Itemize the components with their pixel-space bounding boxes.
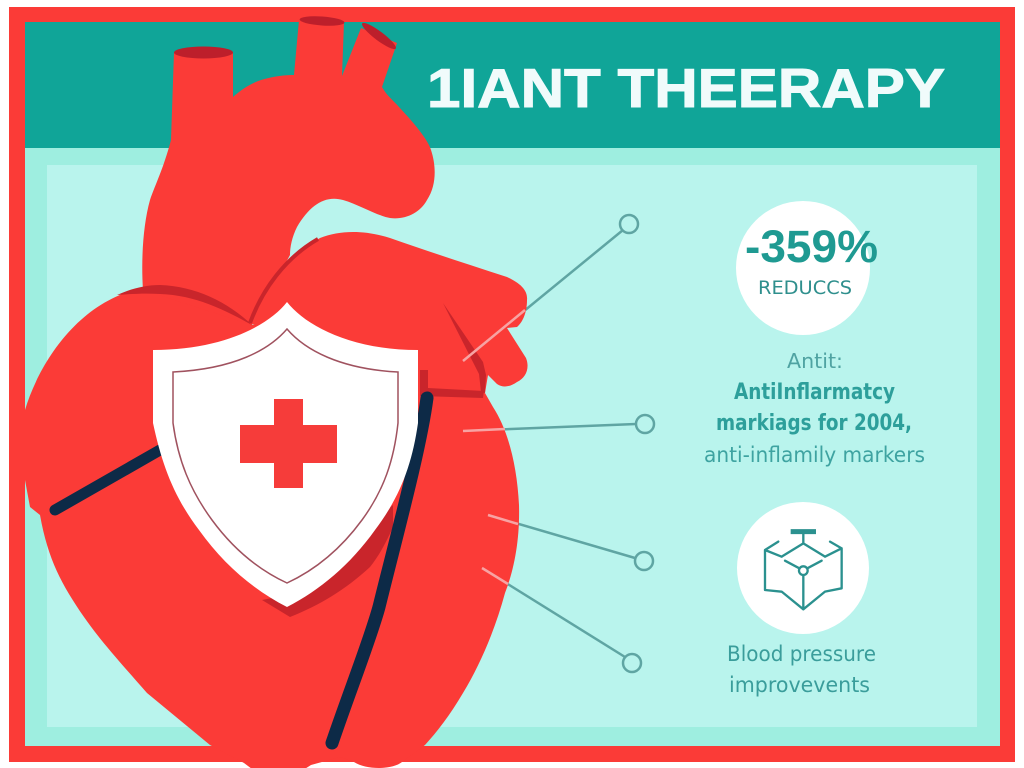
label line 1: Blood pressure (727, 642, 876, 666)
overlay line 4 (482, 568, 508, 584)
text line 4: anti-inflamily markers (704, 443, 925, 467)
band between atrium and ventricle (420, 370, 484, 398)
stat circle (736, 201, 870, 335)
heart illustration (25, 15, 528, 768)
blood pressure stat (727, 502, 876, 697)
overlay line 1 (463, 310, 525, 361)
text line 3: markiags for 2004, (716, 411, 912, 436)
crescent fold on ventricle (117, 285, 252, 325)
label line 2: improvevents (729, 673, 870, 697)
anti-inflammatory text block (704, 349, 925, 467)
heart lower body and ventricle (25, 286, 519, 768)
stat: percent reduction (736, 201, 878, 335)
vessel opening middle (299, 15, 345, 27)
callout connector lines (463, 215, 654, 672)
shield inner outline (173, 329, 398, 583)
shield shadow (262, 505, 393, 617)
icon circle (737, 502, 869, 634)
shield body (153, 302, 418, 607)
vessel opening left (174, 46, 233, 58)
icon: valve cube (765, 532, 842, 609)
pale line overlays inside heart (463, 310, 525, 584)
vessel opening right (360, 20, 398, 52)
crease on atrium (443, 303, 486, 393)
artery right (332, 398, 427, 743)
shield icon (153, 302, 418, 607)
title: 1IANT THEERAPY (427, 57, 945, 119)
header band (25, 22, 1000, 148)
stat label: REDUCCS (758, 277, 852, 299)
artery left (55, 450, 160, 510)
callout line 1 (463, 215, 638, 361)
medical cross (240, 399, 337, 488)
overlay line 3 (488, 515, 518, 524)
text line 2: AntiInflarmatcy (734, 380, 895, 405)
heart aorta and great vessels (142, 20, 435, 325)
callout line 3 (488, 515, 653, 570)
mint background panel (25, 148, 1000, 746)
callout line 4 (482, 568, 641, 672)
overlay line 2 (463, 429, 505, 431)
light content panel (47, 165, 977, 727)
text line 1: Antit: (787, 349, 843, 373)
fold between aorta and atrium (250, 239, 318, 323)
stat value: -359% (745, 221, 878, 272)
callout line 2 (463, 415, 654, 433)
heart right atrium (250, 232, 528, 395)
